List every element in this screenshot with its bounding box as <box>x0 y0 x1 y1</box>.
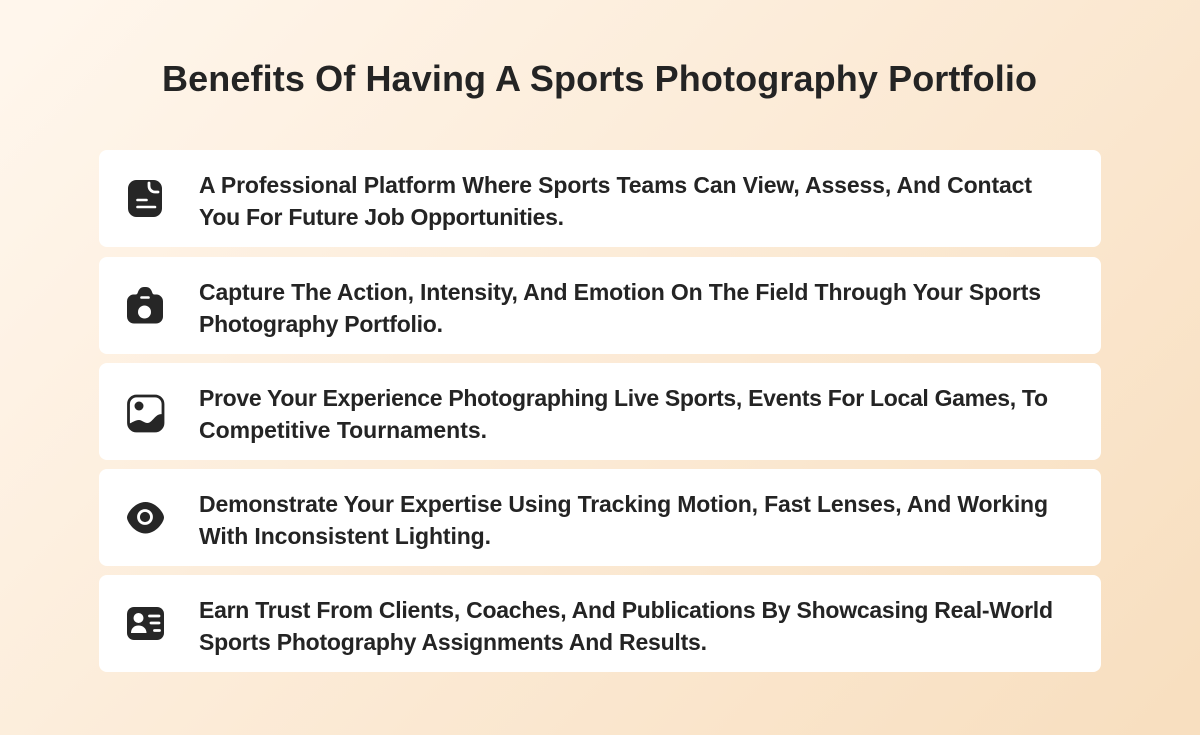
text: capture benefit: Capture The Action, Intensity, And Emotion On The Field Through Your Sports <box>199 279 1041 305</box>
icon: id card <box>127 607 164 640</box>
icon: camera <box>127 287 163 324</box>
title: Benefits Of Having A Sports Photography Portfolio <box>162 58 1037 99</box>
text: expertise benefit: With Inconsistent Lighting. <box>199 523 491 549</box>
panel: earn trust <box>99 575 1101 672</box>
text: experience benefit <box>199 385 1048 443</box>
text: trust benefit: Earn Trust From Clients, Coaches, And Publications By Showcasing Real-World <box>199 597 1053 623</box>
text: trust benefit <box>199 597 1053 655</box>
text: platform benefit <box>199 172 1032 230</box>
icon: image <box>128 396 163 431</box>
panel: demonstrate expertise <box>99 469 1101 566</box>
text: experience benefit: Competitive Tournaments. <box>199 417 487 443</box>
panel: capture the action <box>99 257 1101 354</box>
text: capture benefit: Photography Portfolio. <box>199 311 443 337</box>
text: trust benefit: Sports Photography Assignments And Results. <box>199 629 707 655</box>
icon: document <box>128 180 162 217</box>
text: experience benefit: Prove Your Experience Photographing Live Sports, Events For Local Games, To <box>199 385 1048 411</box>
text: capture benefit <box>199 279 1041 337</box>
text: expertise benefit <box>199 491 1048 549</box>
panel: professional platform <box>99 150 1101 247</box>
panel: prove experience <box>99 363 1101 460</box>
icon: eye <box>127 502 164 534</box>
text: expertise benefit: Demonstrate Your Expertise Using Tracking Motion, Fast Lenses, And Working <box>199 491 1048 517</box>
text: platform benefit: You For Future Job Opportunities. <box>199 204 564 230</box>
text: platform benefit: A Professional Platform Where Sports Teams Can View, Assess, And Contact <box>199 172 1032 198</box>
